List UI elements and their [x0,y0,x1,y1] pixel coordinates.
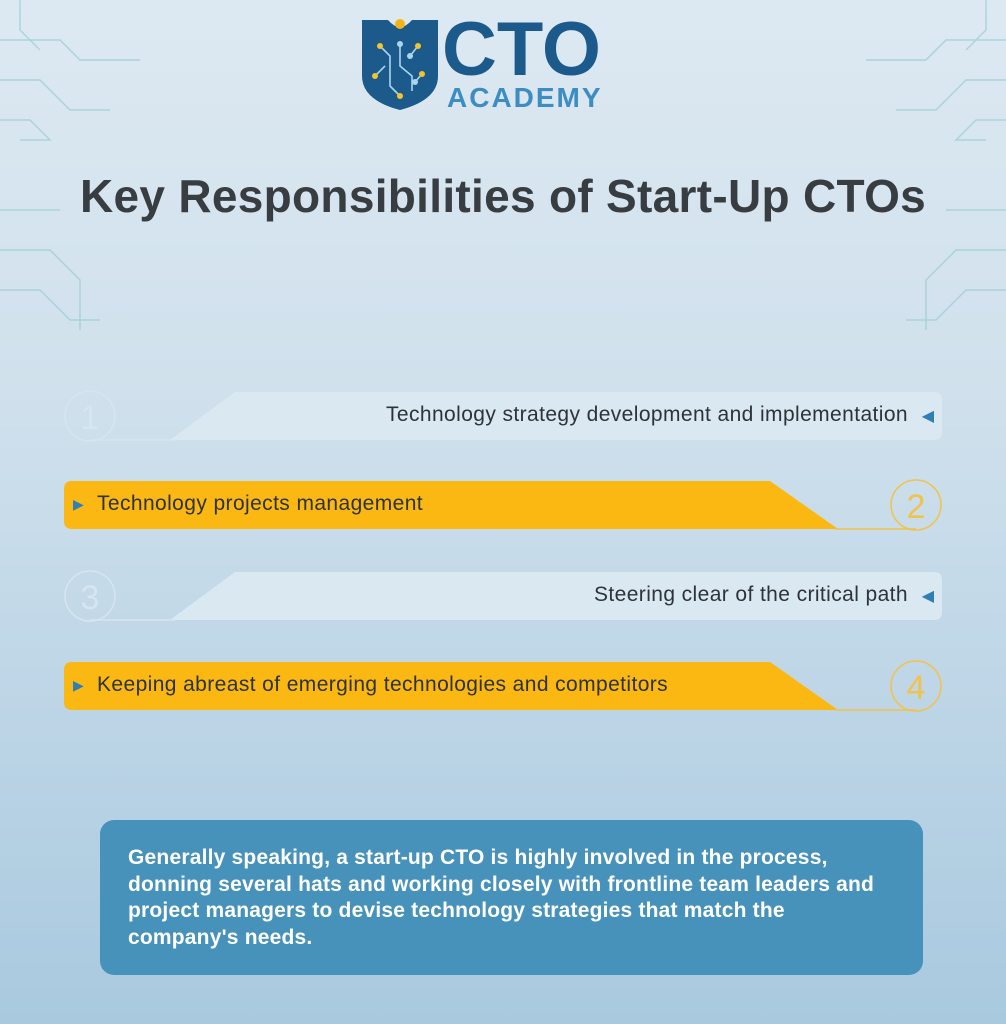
title: Key Responsibilities of Start-Up CTOs [80,170,926,222]
item 2: ▶ [73,496,84,512]
decorative circuit lines [0,0,1006,330]
item 3: Steering clear of the critical path [594,583,908,606]
item 1 [68,392,942,442]
callout box: project managers to devise technology strategies that match the [128,899,785,922]
callout box: Generally speaking, a start-up CTO is highly involved in the process, [128,846,828,869]
callout box: company's needs. [128,926,312,948]
logo text ACADEMY: ACADEMY [447,82,603,113]
callout box [100,820,923,975]
callout box: donning several hats and working closely with frontline team leaders and [128,872,874,896]
item 2: 2 [907,488,925,526]
item 2: Technology projects management [97,492,423,515]
logo text CTO: CTO [442,7,601,92]
item 3 [64,570,942,622]
item 3: 3 [81,579,99,617]
item 4: ▶ [73,677,84,693]
item 1: ◀ [922,408,934,425]
item 4 [64,660,942,712]
icon: shield [362,19,438,110]
logo [362,7,603,113]
item 4: Keeping abreast of emerging technologies and competitors [97,673,668,696]
item 4: 4 [907,669,925,707]
item 3: ◀ [922,588,934,605]
item 1: Technology strategy development and implementation [386,403,908,426]
item 1: 1 [81,399,99,437]
item 2 [64,479,942,531]
